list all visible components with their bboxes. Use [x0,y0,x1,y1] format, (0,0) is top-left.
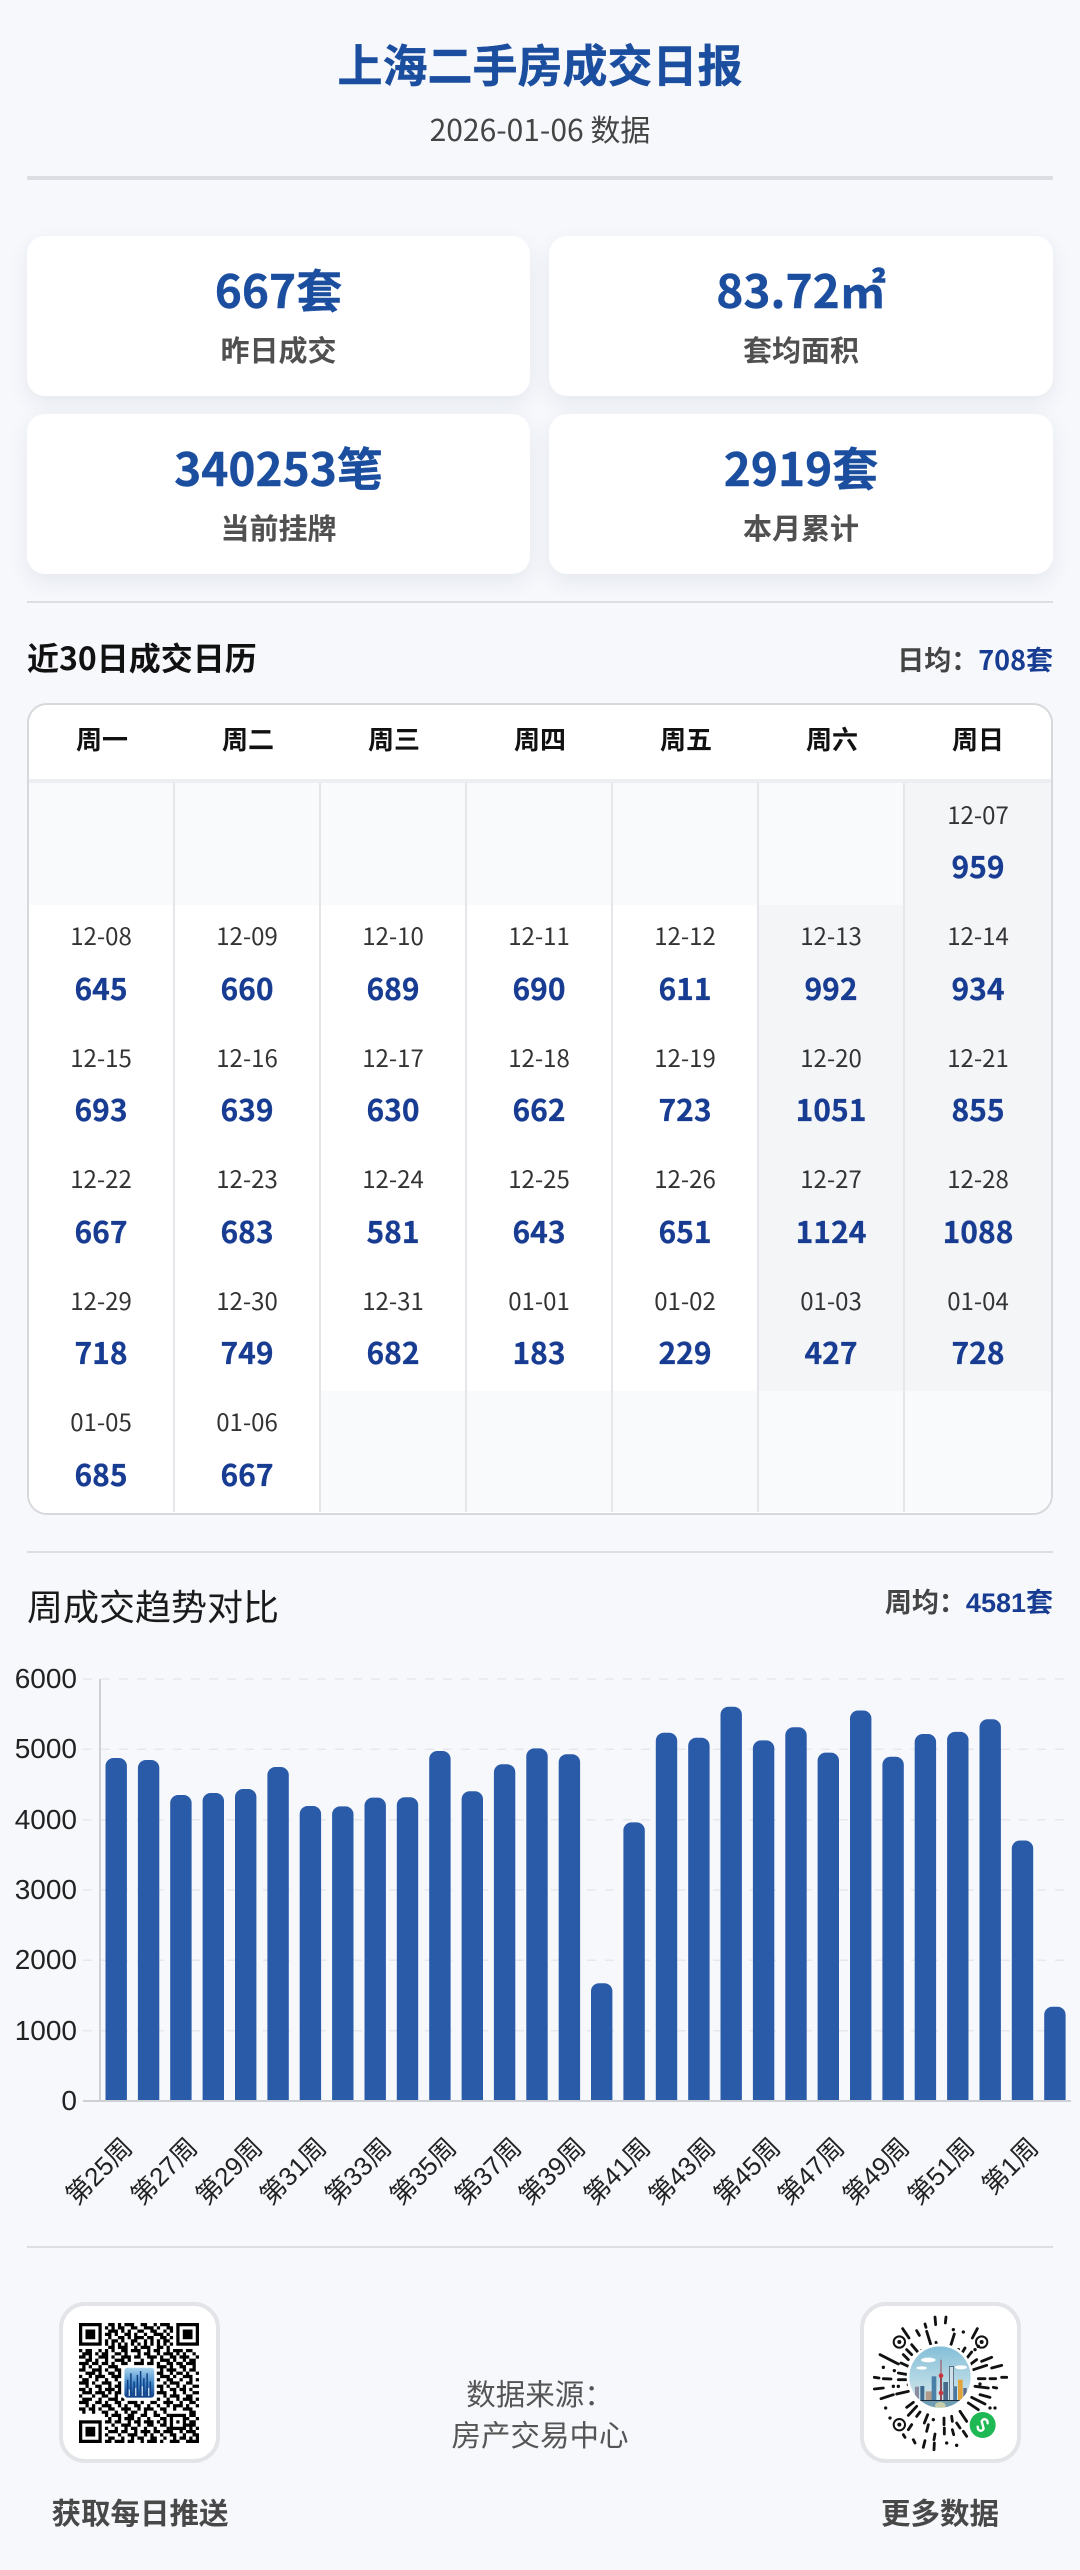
calendar week 4 [70,1148,1051,1269]
bar chart [15,1663,1071,2210]
calendar weekday header: 周日 [952,720,1004,757]
stat card: average area: 83.72㎡ [716,256,886,322]
y axis labels: 0 [61,2085,77,2116]
calendar week 5: 01-02 [654,1282,716,1316]
calendar week 6: 685 [74,1450,128,1494]
calendar week 2: 645 [74,964,128,1008]
stat card: yesterday deals: 667套 [215,256,342,322]
x axis labels: 第33周 [319,2132,397,2210]
calendar week 3: 12-21 [947,1038,1009,1074]
calendar week 2: 690 [512,964,566,1008]
QR code: mini program [860,2302,1021,2463]
chart weekly average: 周均：4581套 [885,1581,1053,1620]
calendar week 3: 1051 [796,1086,866,1130]
calendar week 4: 1124 [796,1208,866,1252]
calendar week 5: 728 [951,1329,1005,1373]
y axis labels: 1000 [15,2015,77,2046]
QR code: daily push [59,2302,220,2463]
x axis labels: 第45周 [708,2132,786,2210]
x axis labels: 第51周 [902,2132,980,2210]
calendar week 6: 01-06 [216,1403,278,1438]
calendar week 3: 693 [74,1086,128,1130]
calendar week 2: 660 [220,964,274,1008]
calendar week 4: 12-24 [362,1160,424,1195]
calendar week 4: 651 [658,1208,712,1252]
calendar week 6: 667 [220,1450,274,1494]
x axis labels: 第37周 [449,2132,527,2210]
calendar week 4: 12-22 [70,1160,132,1195]
x axis labels: 第29周 [190,2132,268,2210]
calendar week 2: 611 [658,964,712,1008]
calendar week 3: 12-17 [362,1038,424,1074]
x axis labels: 第47周 [772,2132,850,2210]
y axis labels [15,1663,77,2116]
calendar week 3: 662 [512,1086,566,1130]
calendar week 2: 12-10 [362,917,424,952]
x axis labels: 第35周 [384,2132,462,2210]
stat card: average area: 套均面积 [743,328,859,370]
title: 上海二手房成交日报 [337,30,742,95]
x axis labels: 第25周 [60,2132,138,2210]
calendar week 6 [29,1391,1046,1512]
calendar week 5: 12-31 [362,1282,424,1316]
calendar week 4: 12-27 [800,1160,862,1195]
footer data source text [451,2372,628,2455]
y axis labels: 5000 [15,1733,77,1764]
stat card: current listings: 当前挂牌 [220,506,336,548]
calendar weekday header: 周二 [222,720,274,757]
calendar week 3: 639 [220,1086,274,1130]
calendar week 5: 183 [512,1329,566,1373]
calendar week 4: 683 [220,1208,274,1252]
calendar week 5: 229 [658,1329,712,1373]
footer data source text: 数据来源： [466,2372,614,2414]
calendar week 3: 855 [951,1086,1005,1130]
calendar week 5: 718 [74,1329,128,1373]
calendar week 5: 749 [220,1329,274,1373]
calendar week 5: 01-01 [508,1282,570,1316]
calendar weekday header: 周五 [660,720,712,757]
x axis labels: 第49周 [837,2132,915,2210]
calendar week 2: 992 [804,964,858,1008]
stat card: yesterday deals [27,236,530,396]
x axis labels: 第43周 [643,2132,721,2210]
calendar week 5: 01-04 [947,1282,1009,1316]
calendar week 4: 12-25 [508,1160,570,1195]
calendar week 3: 630 [366,1086,420,1130]
chart heading: 周成交趋势对比 [27,1579,279,1631]
stat card: yesterday deals: 昨日成交 [220,328,336,370]
stat card: current listings [27,414,530,574]
stat card: current listings: 340253笔 [174,434,383,500]
calendar week 2: 689 [366,964,420,1008]
calendar weekday header: 周六 [806,720,858,757]
calendar week 3: 723 [658,1086,712,1130]
x axis labels: 第41周 [578,2132,656,2210]
calendar week 3 [70,1026,1051,1148]
calendar week 5: 12-30 [216,1282,278,1316]
calendar week 4: 12-28 [947,1160,1009,1195]
calendar weekday header: 周四 [514,720,566,757]
calendar week 5 [70,1269,1051,1391]
calendar week 4: 1088 [943,1208,1013,1252]
calendar week 2: 12-09 [216,917,278,952]
calendar week 3: 12-20 [800,1038,862,1074]
x axis labels [60,2132,1044,2210]
calendar week 6: 01-05 [70,1403,132,1438]
calendar week 2: 12-12 [654,917,716,952]
y axis labels: 4000 [15,1804,77,1835]
calendar week 5: 427 [804,1329,858,1373]
y axis labels: 6000 [15,1663,77,1694]
calendar heading: 近30日成交日历 [27,634,257,680]
calendar weekday header: 周一 [76,720,128,757]
x axis labels: 第27周 [125,2132,203,2210]
y axis labels: 3000 [15,1874,77,1905]
calendar week 4: 667 [74,1208,128,1252]
calendar week 1: 959 [951,843,1005,887]
calendar weekday header: 周三 [368,720,420,757]
calendar week 2: 12-14 [947,917,1009,952]
x axis labels: 第1周 [976,2132,1044,2200]
calendar week 2: 12-11 [508,917,570,952]
weekly bars [106,1707,1066,2101]
stat card: average area [549,236,1053,396]
calendar week 2: 12-13 [800,917,862,952]
calendar week 1: 12-07 [947,796,1009,830]
calendar week 4: 12-26 [654,1160,716,1195]
x axis labels: 第39周 [513,2132,591,2210]
calendar week 5: 682 [366,1329,420,1373]
calendar week 5: 12-29 [70,1282,132,1316]
calendar week 2: 12-08 [70,917,132,952]
calendar week 3: 12-15 [70,1038,132,1074]
calendar weekday header [29,705,1051,783]
calendar week 3: 12-19 [654,1038,716,1074]
caption: more data: 更多数据 [881,2491,999,2533]
stat card: month total: 本月累计 [743,506,859,548]
calendar week 2: 934 [951,964,1005,1008]
stat card: month total [549,414,1053,574]
calendar week 2 [70,905,1051,1026]
calendar week 5: 01-03 [800,1282,862,1316]
panel: calendar [27,703,1053,1515]
calendar week 4: 12-23 [216,1160,278,1195]
caption: daily push: 获取每日推送 [51,2491,228,2533]
calendar week 1 [173,783,1051,905]
stat card: month total: 2919套 [724,434,878,500]
footer data source text: 房产交易中心 [451,2413,628,2455]
calendar week 3: 12-16 [216,1038,278,1074]
date subtitle: 2026-01-06 数据 [430,106,650,150]
calendar daily average: 日均：708套 [897,639,1053,678]
y axis labels: 2000 [15,1944,77,1975]
calendar week 4: 643 [512,1208,566,1252]
calendar week 4: 581 [366,1208,420,1252]
x axis labels: 第31周 [254,2132,332,2210]
calendar week 3: 12-18 [508,1038,570,1074]
